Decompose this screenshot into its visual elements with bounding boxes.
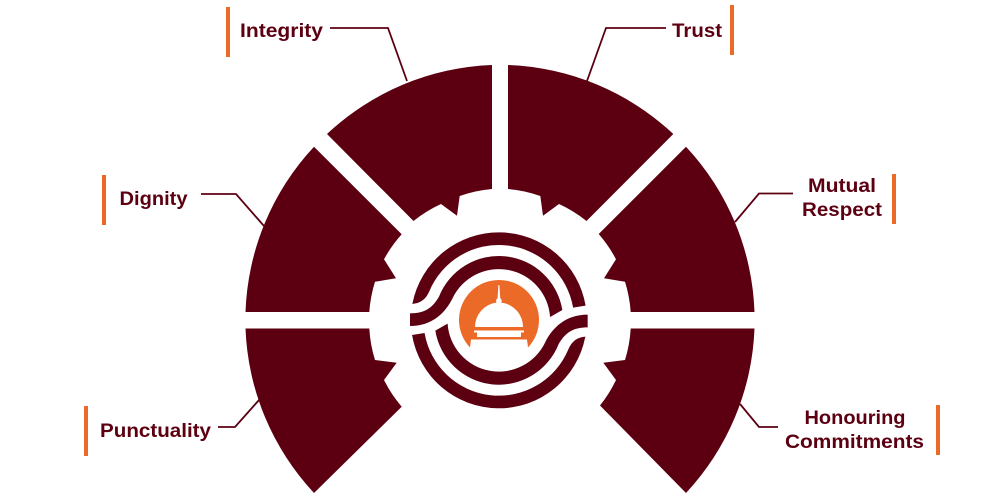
label: Dignity [102, 175, 264, 226]
label: Punctuality: Punctuality [100, 421, 211, 442]
logo: orange disc [459, 280, 539, 348]
label: Dignity: Dignity [120, 189, 188, 210]
label: Punctuality [84, 400, 259, 456]
logo: white dome [474, 285, 524, 337]
segment: Trust [508, 65, 673, 221]
label: Honouring Commitments [740, 404, 940, 455]
label: Mutual Respect: Respect [802, 200, 883, 221]
label: Trust [587, 5, 734, 81]
segment: Mutual Respect [599, 147, 754, 312]
label: Honouring Commitments: Commitments [785, 432, 924, 453]
central logo [410, 232, 588, 408]
label: Honouring Commitments: Honouring [804, 408, 906, 429]
label: Integrity [226, 7, 407, 81]
segment: Punctuality [246, 328, 402, 493]
segment: Dignity [246, 147, 402, 312]
logo: interlocking ring bands [410, 232, 588, 408]
label: Integrity: Integrity [240, 21, 323, 42]
label: Trust: Trust [672, 21, 723, 42]
label: Mutual Respect: Mutual [808, 176, 876, 197]
segment: Integrity [327, 65, 492, 221]
label: Mutual Respect [735, 174, 896, 224]
segment: Honouring Commitments [600, 328, 754, 493]
